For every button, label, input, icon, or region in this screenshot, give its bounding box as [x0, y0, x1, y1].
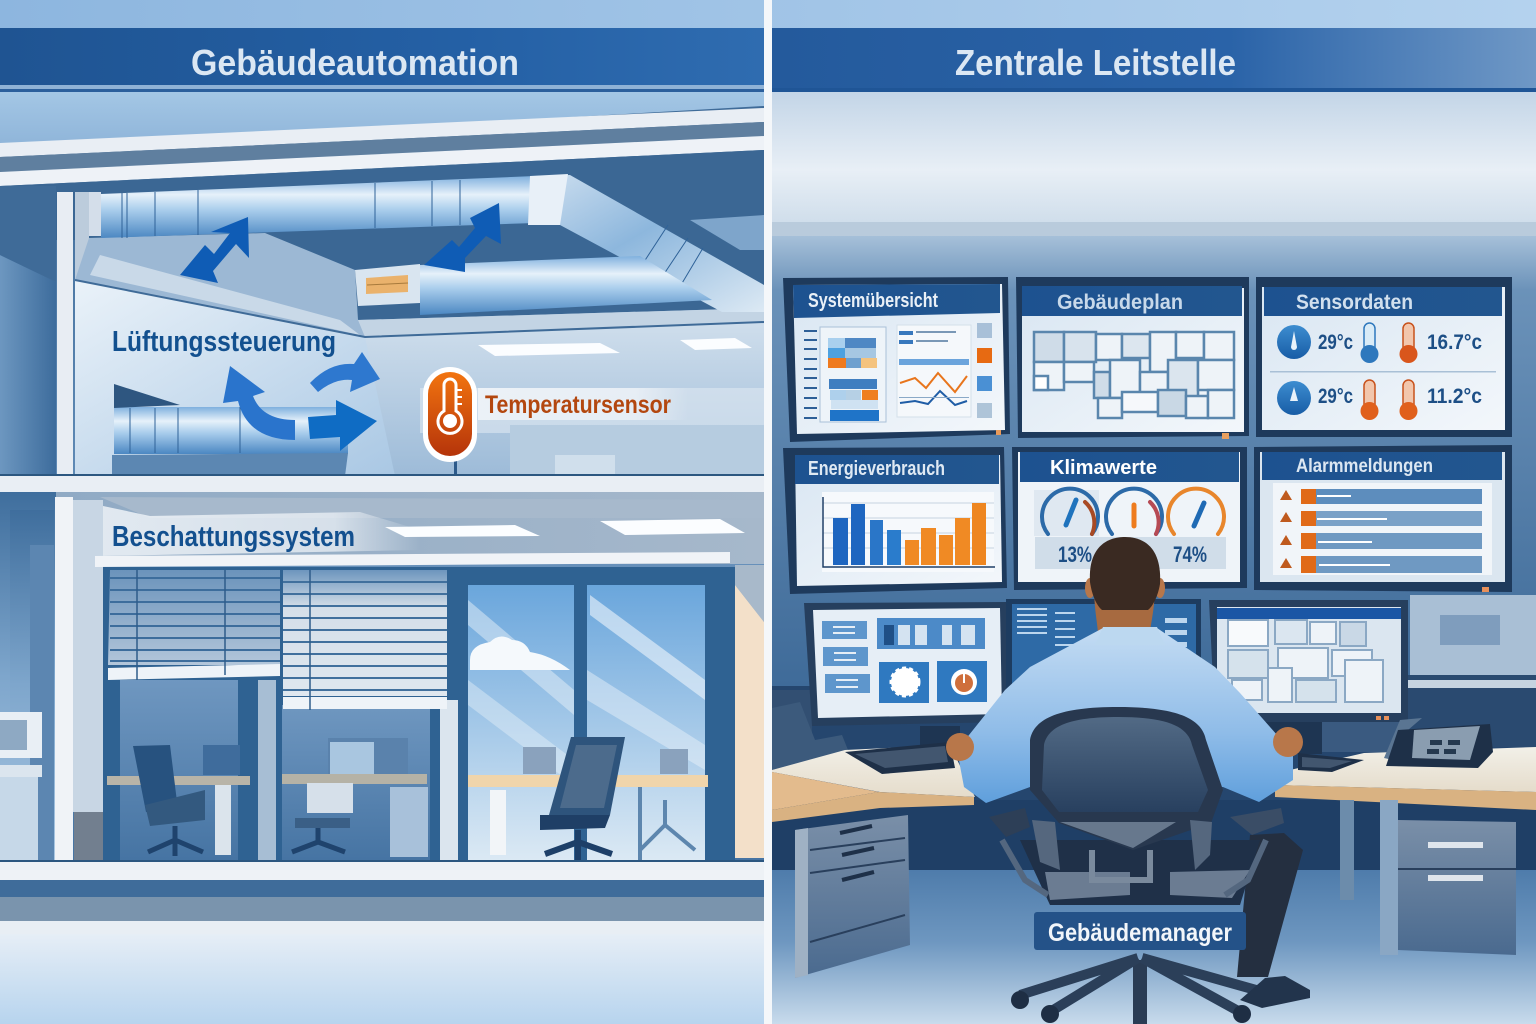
panel: Gebäudeautomation	[0, 28, 764, 1024]
window frames and interior	[103, 567, 735, 862]
ventilation ducts	[101, 174, 764, 476]
lower floor background	[0, 492, 764, 862]
monitor stands and rear desk equipment	[772, 702, 1408, 770]
manager at desk	[946, 537, 1303, 977]
monitor: Energieverbrauch: Energieverbrauch	[808, 458, 945, 480]
blinds	[108, 570, 447, 710]
control room background	[772, 92, 1536, 1024]
lower monitor: floor plan	[1209, 600, 1408, 722]
cloud	[470, 636, 570, 670]
label: Beschattungssystem: Beschattungssystem	[112, 521, 355, 553]
sensor row two	[1277, 380, 1482, 420]
icon: gear	[891, 668, 919, 696]
upper floor background	[0, 88, 764, 480]
desk	[772, 745, 1536, 822]
monitor: Klimawerte	[1012, 447, 1247, 590]
header: Gebäudeautomation: Gebäudeautomation	[191, 42, 519, 83]
monitor: Systemübersicht	[783, 277, 1010, 442]
label: Gebäudemanager	[1034, 912, 1246, 950]
bar chart	[822, 492, 995, 572]
icon: dial	[951, 669, 977, 695]
legs	[1237, 833, 1303, 977]
appliance on left wall	[0, 712, 42, 860]
monitor: Gebäudeplan: Gebäudeplan	[1057, 291, 1183, 314]
sloped soffit and rooms	[75, 233, 764, 476]
icon: telephone	[1384, 718, 1493, 768]
monitor: Alarmmeldungen	[1254, 445, 1512, 592]
gauge values	[1035, 537, 1226, 569]
chart: line trends	[897, 325, 971, 417]
person: shirt	[957, 627, 1293, 803]
lower monitor: dashboard	[804, 602, 1008, 726]
arrows: ventilation airflow	[180, 203, 501, 451]
gauges	[1034, 489, 1224, 536]
gauge values: 13%	[1058, 542, 1092, 567]
label: Gebäudemanager: Gebäudemanager	[1048, 919, 1232, 947]
person: hands	[946, 727, 1303, 761]
icon: temperature sensor	[423, 367, 477, 476]
top background strip	[0, 0, 1536, 30]
gauge values: 74%	[1173, 542, 1207, 567]
label: Lüftungssteuerung: Lüftungssteuerung	[112, 326, 336, 358]
sensor row one: 16.7°c	[1427, 331, 1482, 354]
sensor row one: 29°c	[1318, 331, 1353, 354]
window ledge and floor	[0, 860, 764, 1024]
monitor: Klimawerte: Klimawerte	[1050, 457, 1157, 479]
header: Zentrale Leitstelle	[772, 28, 1536, 92]
monitor: Sensordaten	[1256, 277, 1512, 437]
floor divider	[0, 474, 764, 492]
monitor: Alarmmeldungen: Alarmmeldungen	[1296, 456, 1433, 477]
monitor: Energieverbrauch	[783, 447, 1007, 594]
desks, monitors and chairs	[107, 737, 708, 860]
lower monitor: centre data screen	[1006, 599, 1201, 699]
office chair	[989, 707, 1310, 1024]
filing cabinets	[795, 800, 1516, 978]
panel: Zentrale Leitstelle	[772, 28, 1536, 1024]
curtain rail	[95, 552, 730, 567]
header: Zentrale Leitstelle: Zentrale Leitstelle	[955, 42, 1236, 83]
monitor: Systemübersicht: Systemübersicht	[808, 290, 938, 312]
panel divider	[764, 0, 772, 1024]
sensor row two: 11.2°c	[1427, 385, 1482, 408]
person: head	[1085, 537, 1165, 635]
floor plan	[1034, 332, 1234, 418]
sensor row one	[1277, 323, 1482, 363]
alarm rows	[1280, 489, 1482, 573]
monitor: Gebäudeplan	[1016, 277, 1249, 439]
monitor: Sensordaten: Sensordaten	[1296, 291, 1413, 314]
chart: status table	[804, 327, 886, 422]
sensor row two: 29°c	[1318, 385, 1353, 408]
keyboards	[845, 742, 1364, 774]
status squares	[977, 323, 1001, 435]
label: Temperatursensor: Temperatursensor	[485, 391, 671, 419]
header: Gebäudeautomation	[0, 28, 764, 92]
